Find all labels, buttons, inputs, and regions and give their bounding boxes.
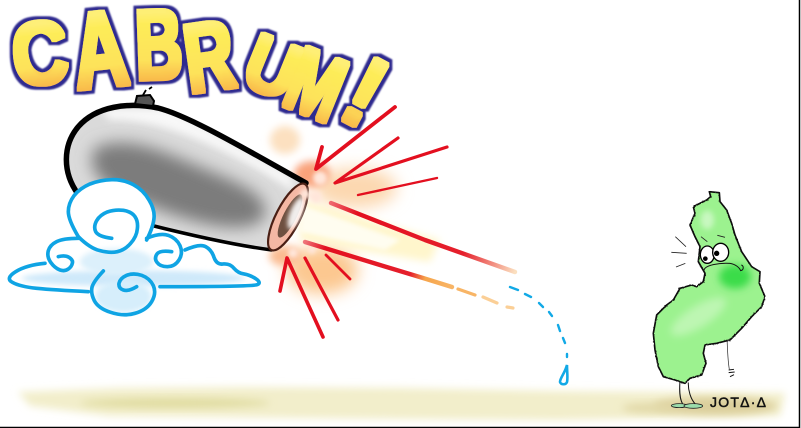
- legs and feet: [671, 381, 703, 408]
- face: [700, 235, 743, 271]
- red burst rays: [280, 107, 515, 337]
- title: CABRUM!: [7, 0, 406, 150]
- cloud: [5, 179, 262, 317]
- title: CABRUM!: !: [325, 35, 406, 150]
- title: CABRUM!: M: [272, 26, 360, 142]
- water drop: [560, 365, 567, 384]
- island body: [653, 192, 765, 383]
- falling water dashes and drop: [510, 287, 567, 384]
- ray group bottom: [326, 255, 350, 279]
- cannon: [66, 87, 315, 255]
- cannon mouth: [261, 179, 315, 255]
- title: CABRUM!: C: [7, 0, 73, 106]
- ray group top: [316, 107, 395, 169]
- fear marks: [671, 237, 687, 267]
- signature: JOTΔ·Δ: [710, 394, 766, 410]
- title: CABRUM!: R: [177, 0, 241, 114]
- fading dashes: [458, 289, 513, 308]
- fuse: [135, 87, 154, 106]
- arm: [727, 327, 735, 377]
- title: CABRUM!: U: [232, 16, 312, 117]
- explosion glow: [269, 126, 440, 294]
- ground shadow: [18, 387, 785, 420]
- island character: [653, 192, 765, 408]
- long streak lower: [305, 242, 452, 287]
- sparks: [288, 171, 327, 258]
- long streak upper: [331, 203, 515, 272]
